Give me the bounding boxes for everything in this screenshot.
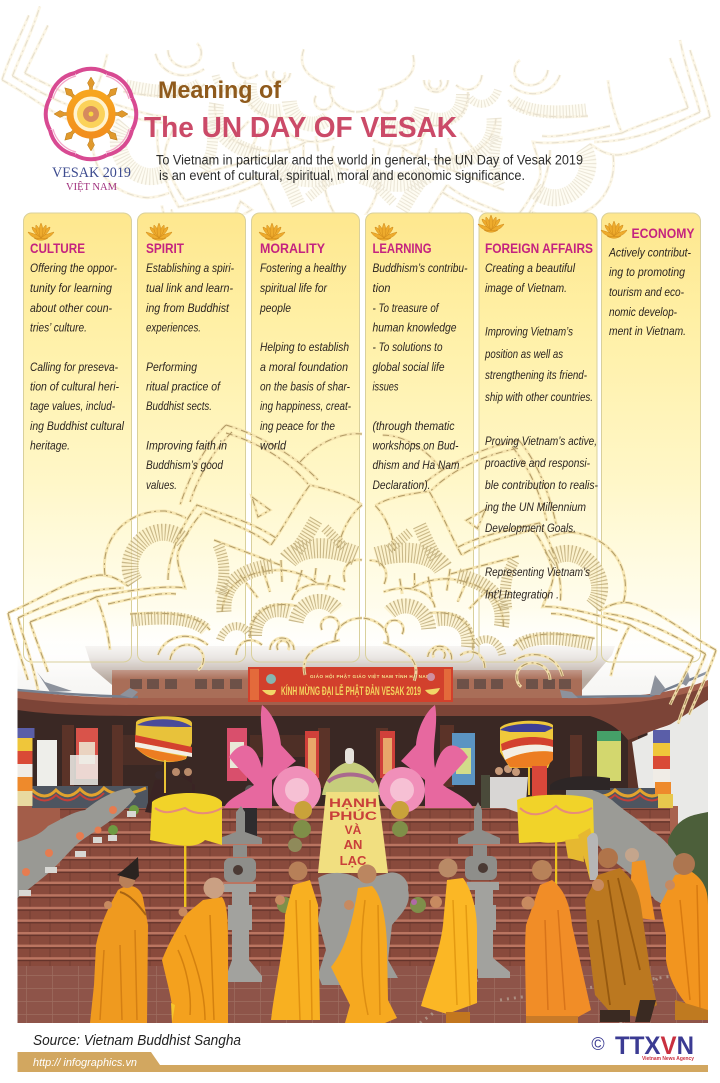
morality text (259, 241, 351, 452)
red banner over the hall: KÍNH MỪNG ĐẠI LỄ PHẬT ĐẢN VESAK 2019 (281, 683, 421, 698)
monk 2 (162, 878, 228, 1023)
spirit text: SPIRIT (146, 241, 185, 256)
red banner over the hall (248, 667, 453, 702)
logo: Vesak 2019 Viet Nam: VIỆT NAM (66, 181, 118, 193)
buddhist flag right (653, 730, 673, 808)
learning text (372, 241, 468, 492)
monk 1 (90, 857, 148, 1023)
parasol yellow left (150, 793, 222, 907)
parasol red left (135, 716, 192, 793)
monk 7 (585, 848, 657, 1022)
monks in robes (90, 828, 708, 1023)
slogan sign: VÀ (345, 822, 362, 837)
learning text: human knowledge (372, 322, 457, 334)
learning text: Buddhism’s contribu- (372, 262, 468, 275)
morality text: on the basis of shar- (260, 380, 350, 394)
learning text: tion (372, 282, 390, 295)
spirit text: Buddhist sects. (146, 400, 212, 413)
people on the terrace (145, 765, 610, 837)
foreign affairs text: Improving Vietnam’s (485, 326, 573, 338)
spirit text: values. (146, 479, 177, 492)
intro text (156, 152, 583, 183)
parasol red right (500, 721, 553, 796)
lower decorative mandala (8, 425, 720, 727)
upper roof (85, 646, 615, 690)
buddhist flag left (18, 728, 34, 806)
interior of the hall (18, 705, 648, 807)
foreign affairs text: Representing Vietnam’s (485, 566, 590, 579)
culture text: about other coun- (30, 302, 112, 315)
morality text: spiritual life for (260, 282, 328, 295)
morality text: a moral foundation (260, 361, 348, 374)
icon: lotus (478, 215, 504, 232)
hanging banners (37, 728, 621, 786)
upper decorative mandala (0, 6, 712, 215)
icon: lotus (601, 221, 627, 238)
panel: spirit (138, 213, 246, 662)
icon: lotus (259, 223, 285, 240)
culture text: ing Buddhist cultural (30, 420, 124, 433)
morality text: ing happiness, creat- (260, 400, 351, 413)
learning text: global social life (372, 361, 445, 374)
learning text: dhism and Ha Nam (372, 459, 460, 472)
foreign affairs text: ble contribution to realis- (485, 479, 598, 492)
culture text: Offering the oppor- (30, 262, 117, 275)
learning text: - To solutions to (372, 341, 443, 354)
panel: learning (366, 213, 474, 662)
icon: lotus (146, 223, 172, 240)
morality text: ing peace for the (260, 420, 335, 433)
morality text: people (259, 302, 291, 315)
flower arrangements (288, 801, 409, 852)
title: Meaning of (158, 77, 282, 104)
spirit text: Improving faith in (146, 440, 227, 452)
logo: TTXVN: Vietnam News Agency (642, 1056, 695, 1062)
spirit text (146, 241, 234, 492)
tree (668, 812, 708, 905)
foreign affairs text: ship with other countries. (485, 391, 593, 404)
monks in background (565, 828, 592, 880)
monk 3 (271, 862, 320, 1020)
slogan sign: HẠNH (329, 796, 377, 810)
stone dragon railing left (18, 788, 136, 898)
sky right of the roof (632, 700, 708, 788)
stairs (18, 866, 60, 966)
source text: Source: Vietnam Buddhist Sangha (33, 1033, 241, 1049)
sky (18, 675, 708, 735)
culture text: tries’ culture. (30, 322, 87, 334)
stone dragon railing right (566, 790, 680, 904)
foreign affairs text: ing the UN Millennium (485, 501, 586, 514)
icon: copyright: © (591, 1034, 605, 1054)
economy text: ment in Vietnam. (609, 325, 686, 338)
spirit text: Performing (146, 361, 197, 374)
monk 8 (660, 853, 708, 1020)
morality text: MORALITY (260, 241, 325, 256)
spirit text: ritual practice of (146, 380, 222, 394)
morality text: Fostering a healthy (260, 262, 347, 275)
intro text: is an event of cultural, spiritual, moral and economic significance. (159, 168, 525, 183)
flower pots (19, 805, 139, 896)
brick side walls (18, 806, 60, 866)
lower roof (18, 682, 708, 740)
foreign affairs text: proactive and responsi- (484, 457, 590, 470)
foreign affairs text: image of Vietnam. (485, 282, 567, 295)
title (144, 77, 457, 144)
foreign affairs text (484, 241, 598, 602)
photo: monks procession at the temple (18, 640, 708, 1023)
logo: TTXVN: TTXVN (615, 1032, 694, 1060)
learning text: (through thematic (372, 420, 455, 433)
monk 5 (421, 858, 477, 1023)
slogan sign: PHÚC (329, 808, 377, 823)
morality text: world (260, 440, 287, 452)
spirit text: ing from Buddhist (146, 302, 230, 315)
icon: lotus (28, 223, 54, 240)
intro text: To Vietnam in particular and the world in general, the UN Day of Vesak 2019 (156, 152, 583, 168)
culture text (30, 241, 124, 452)
morality text: Helping to establish (260, 341, 349, 354)
flowers by the stone dragons (277, 895, 426, 913)
panel: economy (601, 213, 700, 662)
foreign affairs text: Int’l Integration . (485, 588, 559, 602)
stone lantern left (220, 806, 262, 982)
economy text: nomic develop- (609, 306, 677, 319)
culture text: CULTURE (30, 241, 85, 256)
icon: lotus (371, 223, 397, 240)
monk 6 (522, 860, 591, 1023)
slogan sign: LẠC (340, 853, 367, 868)
culture text: tion of cultural heri- (30, 380, 119, 394)
red banner over the hall: GIÁO HỘI PHẬT GIÁO VIỆT NAM TỈNH HÀ NAM (310, 672, 430, 679)
pink decoration left (224, 705, 321, 814)
footer bar (18, 1052, 708, 1072)
foreign affairs text: Creating a beautiful (485, 262, 575, 275)
spirit text: tual link and learn- (146, 282, 233, 295)
spirit text: experiences. (146, 322, 201, 334)
foreign affairs text: Development Goals. (485, 522, 576, 535)
spirit text: Establishing a spiri- (146, 262, 234, 275)
slogan sign (318, 792, 388, 873)
learning text: - To treasure of (372, 302, 440, 315)
spirit text: Buddhism’s good (146, 459, 223, 472)
economy text: Actively contribut- (608, 246, 691, 260)
economy text (608, 226, 694, 338)
stone lantern right (458, 802, 510, 978)
railings with garlands (32, 786, 670, 808)
parasol yellow right (517, 795, 594, 890)
learning text: Declaration). (372, 479, 430, 492)
flower mound and statue (322, 748, 380, 795)
foreign affairs text: FOREIGN AFFAIRS (485, 241, 593, 256)
panel: morality (252, 213, 360, 662)
culture text: tunity for learning (30, 282, 113, 295)
economy text: ing to promoting (609, 266, 686, 279)
economy text: ECONOMY (632, 226, 694, 241)
brick floor (18, 966, 708, 1023)
learning text: workshops on Bud- (372, 440, 459, 452)
culture text: tage values, includ- (30, 400, 115, 413)
slogan sign: AN (344, 837, 362, 852)
photo top fade (17, 636, 709, 680)
foreign affairs text: Proving Vietnam’s active, (485, 435, 597, 448)
logo: Vesak 2019 Viet Nam (46, 69, 136, 193)
culture text: Calling for preseva- (30, 361, 118, 374)
culture text: heritage. (30, 440, 70, 452)
panel: culture (24, 213, 132, 662)
icon: dharma wheel (46, 69, 136, 159)
panel: foreign affairs (478, 213, 597, 662)
learning text: issues (372, 380, 399, 394)
logo text: VESAK 2019 (52, 165, 131, 181)
foreign affairs text: strengthening its friend- (485, 369, 587, 382)
foreign affairs text: position as well as (484, 348, 563, 361)
footer bar: http:// infographics.vn (33, 1057, 137, 1069)
economy text: tourism and eco- (609, 286, 684, 299)
title: The UN DAY OF VESAK (144, 112, 457, 144)
monk 4 (331, 864, 397, 1023)
pink decoration right (379, 705, 473, 813)
learning text: LEARNING (372, 241, 432, 256)
central stone dragons (318, 872, 409, 985)
